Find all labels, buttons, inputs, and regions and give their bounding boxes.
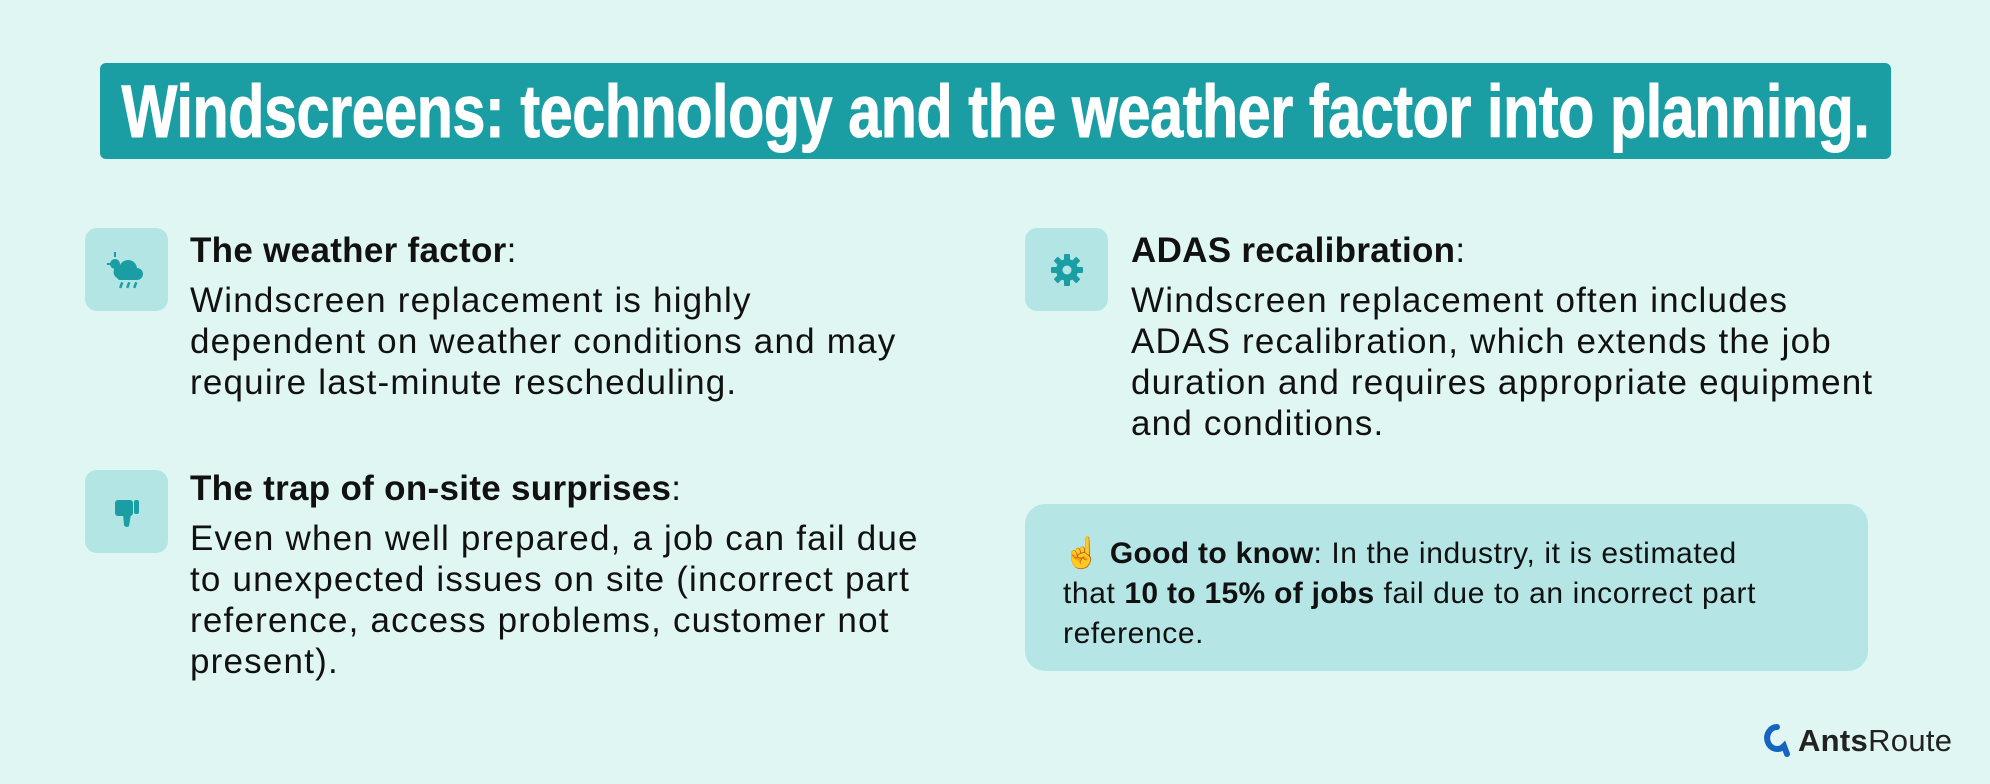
text: ADAS recalibration xyxy=(1131,231,1873,443)
text: on-site surprises: Even when well prepared, a job can fail due xyxy=(190,519,919,558)
text: weather factor xyxy=(190,231,896,402)
icon: thumbs down xyxy=(85,470,168,553)
callout: good to know xyxy=(1025,504,1868,671)
text: ADAS recalibration: and conditions. xyxy=(1131,404,1384,443)
text: ADAS recalibration: ADAS recalibration, which extends the job xyxy=(1131,322,1832,361)
logo icon xyxy=(1764,724,1790,757)
text: ADAS recalibration: duration and requires appropriate equipment xyxy=(1131,363,1873,402)
text: weather factor: The weather factor: xyxy=(190,231,518,270)
text: ADAS recalibration: Windscreen replacement often includes xyxy=(1131,281,1788,320)
text: on-site surprises: present). xyxy=(190,642,339,681)
text: ADAS recalibration: ADAS recalibration: xyxy=(1131,231,1466,270)
icon: gear xyxy=(1025,228,1108,311)
text: on-site surprises: to unexpected issues on site (incorrect part xyxy=(190,560,910,599)
text: on-site surprises xyxy=(190,469,919,681)
text: on-site surprises: The trap of on-site surprises: xyxy=(190,469,682,508)
callout text: reference. xyxy=(1063,617,1204,650)
text: weather factor: dependent on weather conditions and may xyxy=(190,322,896,361)
icon: weather xyxy=(85,228,168,311)
text: weather factor: require last-minute rescheduling. xyxy=(190,363,737,402)
text: weather factor: Windscreen replacement is highly xyxy=(190,281,752,320)
title bar: Windscreens: technology and the weather factor into planning. xyxy=(122,70,1869,152)
callout text: ☝️ Good to know: In the industry, it is estimated xyxy=(1063,537,1737,570)
logo: AntsRoute xyxy=(1764,723,1952,758)
text: on-site surprises: reference, access problems, customer not xyxy=(190,601,890,640)
callout text xyxy=(1063,536,1756,650)
logo text: AntsRoute xyxy=(1798,723,1952,758)
callout text: that 10 to 15% of jobs fail due to an incorrect part xyxy=(1063,577,1756,610)
